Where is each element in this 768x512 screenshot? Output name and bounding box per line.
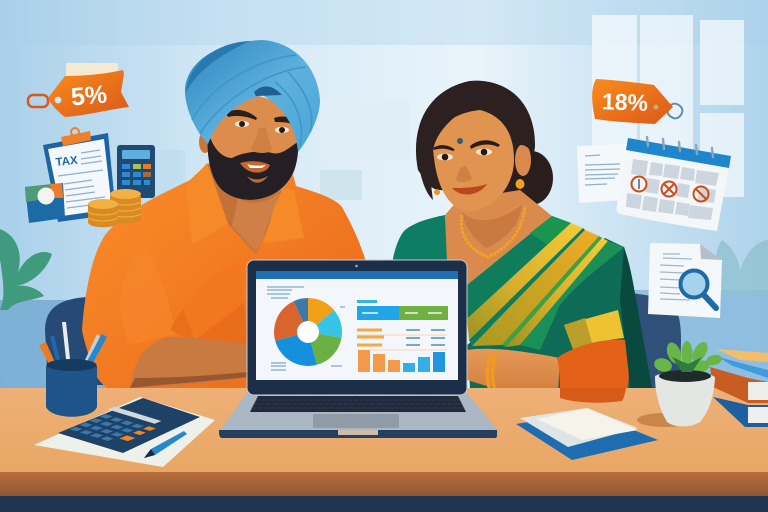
woman: sari yellow band: [467, 223, 583, 340]
woman: hair front: [418, 81, 535, 200]
woman: [393, 81, 652, 403]
woman: bangles: [487, 354, 496, 390]
man: beard: [208, 130, 298, 200]
woman: sleeve: [557, 340, 629, 403]
laptop: table rows: [357, 330, 447, 350]
woman: eyes and brows: [433, 145, 455, 151]
pen holder: [39, 322, 107, 417]
document with magnifier: [648, 243, 722, 318]
woman: blouse: [393, 215, 448, 262]
man: right collar: [264, 188, 304, 243]
18% price tag: [592, 79, 685, 124]
laptop: pie chart: [274, 298, 342, 366]
laptop: trackpad: [313, 414, 399, 428]
tax clipboard: [43, 128, 116, 222]
man: torso shirt: [82, 163, 366, 395]
woman: nose: [456, 166, 472, 182]
desk pen: [144, 431, 187, 458]
calculator display: [108, 407, 161, 424]
woman: necklace: [461, 207, 525, 257]
woman: face: [433, 110, 514, 212]
woman: neck and chest: [445, 190, 552, 285]
5% price tag: [28, 63, 129, 117]
coin stacks: [88, 189, 141, 227]
left background plant: [0, 228, 52, 310]
woman: sari gold band: [472, 230, 599, 346]
desk calculator: [58, 398, 200, 453]
laptop: screen: [256, 271, 458, 380]
notebook: [516, 408, 658, 460]
woman: hair bun: [509, 151, 553, 205]
woman: sari second yellow band: [506, 238, 608, 347]
man: [82, 40, 366, 395]
small book: [25, 183, 65, 223]
man: eyes and brows: [226, 110, 257, 120]
window on the right: [592, 15, 744, 197]
woman: earrings: [516, 179, 524, 189]
woman: forearm: [467, 349, 560, 392]
5% price tag: 5%: [70, 80, 108, 112]
laptop: screen text lines: [267, 287, 345, 370]
woman: sari blouse base: [467, 238, 652, 388]
woman: sari right edge: [620, 247, 652, 388]
stack of books: [710, 349, 768, 427]
laptop: keyboard: [250, 396, 466, 412]
woman: bindi: [457, 138, 463, 144]
woman: sari dark stripe: [469, 228, 585, 346]
tax clipboard: TAX: [55, 155, 79, 169]
man: face: [208, 94, 299, 196]
man: turban: [185, 40, 320, 152]
paper sheet: [577, 144, 630, 203]
woman: sari outer green band: [520, 241, 624, 350]
right background plant: [716, 240, 768, 295]
left chair: [45, 297, 110, 385]
plant leaves: [653, 339, 723, 376]
laptop: [219, 260, 497, 438]
woman: lips: [452, 184, 487, 195]
man: neck: [208, 165, 296, 254]
man: forearm: [130, 337, 248, 388]
man: left collar: [186, 163, 228, 244]
calculator on wall: [117, 145, 155, 198]
woman: sleeve lower edge on desk: [560, 388, 626, 403]
18% price tag: 18%: [602, 88, 648, 116]
desk paper: [34, 397, 215, 467]
right chair: [625, 292, 681, 388]
desk: [0, 388, 768, 512]
laptop: base: [219, 393, 497, 438]
potted plant: [637, 339, 723, 427]
woman: hair: [416, 81, 535, 200]
man: ear: [199, 131, 211, 153]
woman: ear: [515, 144, 531, 176]
calculator keys: [69, 413, 157, 445]
laptop: lid: [247, 260, 467, 395]
woman: gold armband: [564, 310, 624, 349]
man: nose: [251, 127, 272, 153]
laptop: bar chart: [358, 350, 445, 372]
calendar: [616, 137, 731, 231]
background: office wall: [0, 0, 768, 400]
woman: sari green band: [467, 216, 571, 319]
laptop: summary band: [357, 306, 448, 320]
